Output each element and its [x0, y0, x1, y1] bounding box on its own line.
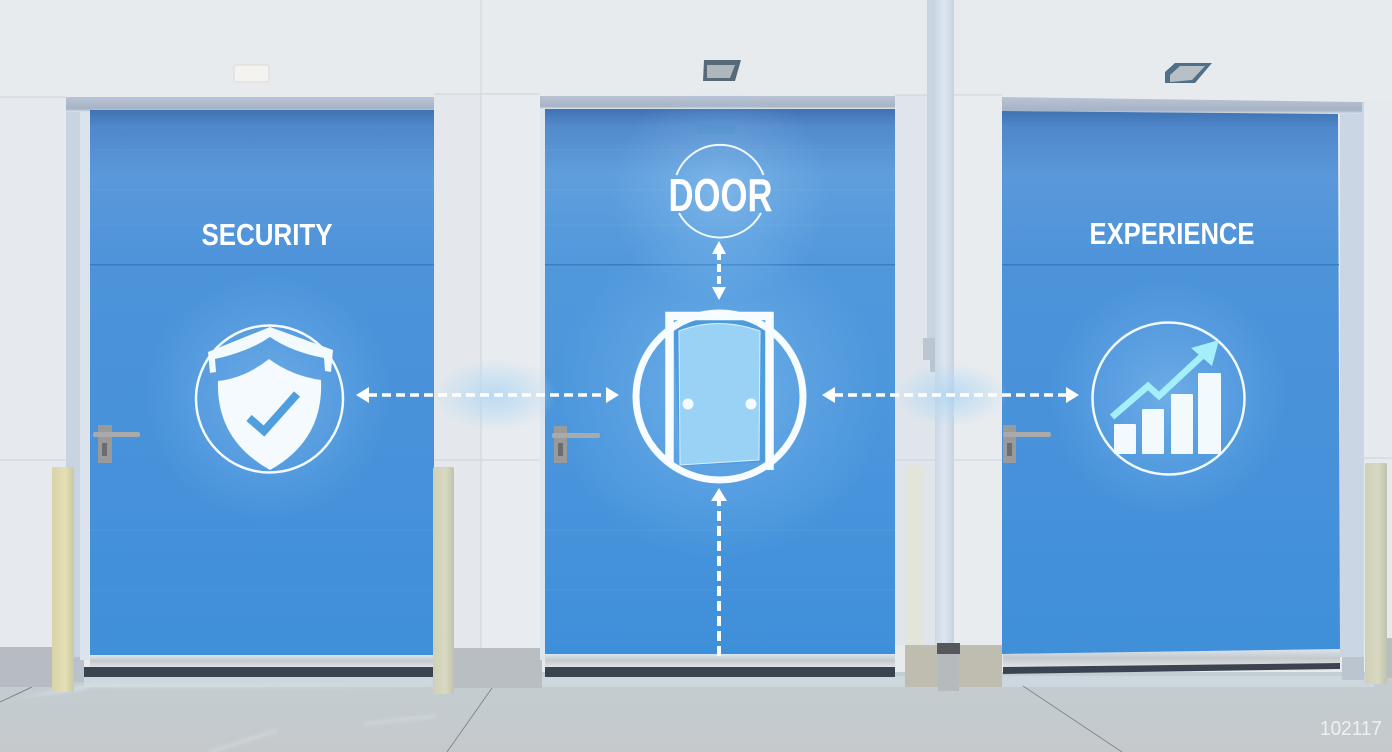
- heading: door with ring: DOOR: [668, 169, 772, 221]
- door handle: [93, 425, 140, 463]
- plinth bands: [0, 630, 1392, 688]
- panel: security door: [84, 110, 434, 677]
- door lintels: [66, 96, 1362, 114]
- drain pipes: [923, 0, 960, 691]
- icon: growth chart: [1092, 322, 1244, 474]
- concrete ground: [0, 672, 1392, 752]
- arrow: upward into door icon: [711, 488, 727, 656]
- door seal: [84, 655, 434, 677]
- heading: security: SECURITY: [202, 217, 333, 252]
- icon: central door: [636, 313, 803, 480]
- heading: door with ring: [668, 145, 772, 238]
- wall lights: [234, 60, 1212, 83]
- image code: 102117: [1320, 718, 1382, 740]
- door seal: [545, 654, 895, 677]
- arrow: security to door: [356, 359, 619, 431]
- icon: security shield: [196, 326, 343, 472]
- panel: door: [545, 82, 895, 677]
- panel: experience door: [1002, 111, 1340, 674]
- door handle: [1003, 425, 1051, 463]
- bollards: [52, 463, 1387, 694]
- door handle: [552, 426, 600, 463]
- door seal: [1003, 649, 1340, 674]
- arrow: door label to door icon: [712, 241, 726, 300]
- heading: experience: EXPERIENCE: [1090, 216, 1254, 251]
- arrow: door to experience: [822, 363, 1079, 427]
